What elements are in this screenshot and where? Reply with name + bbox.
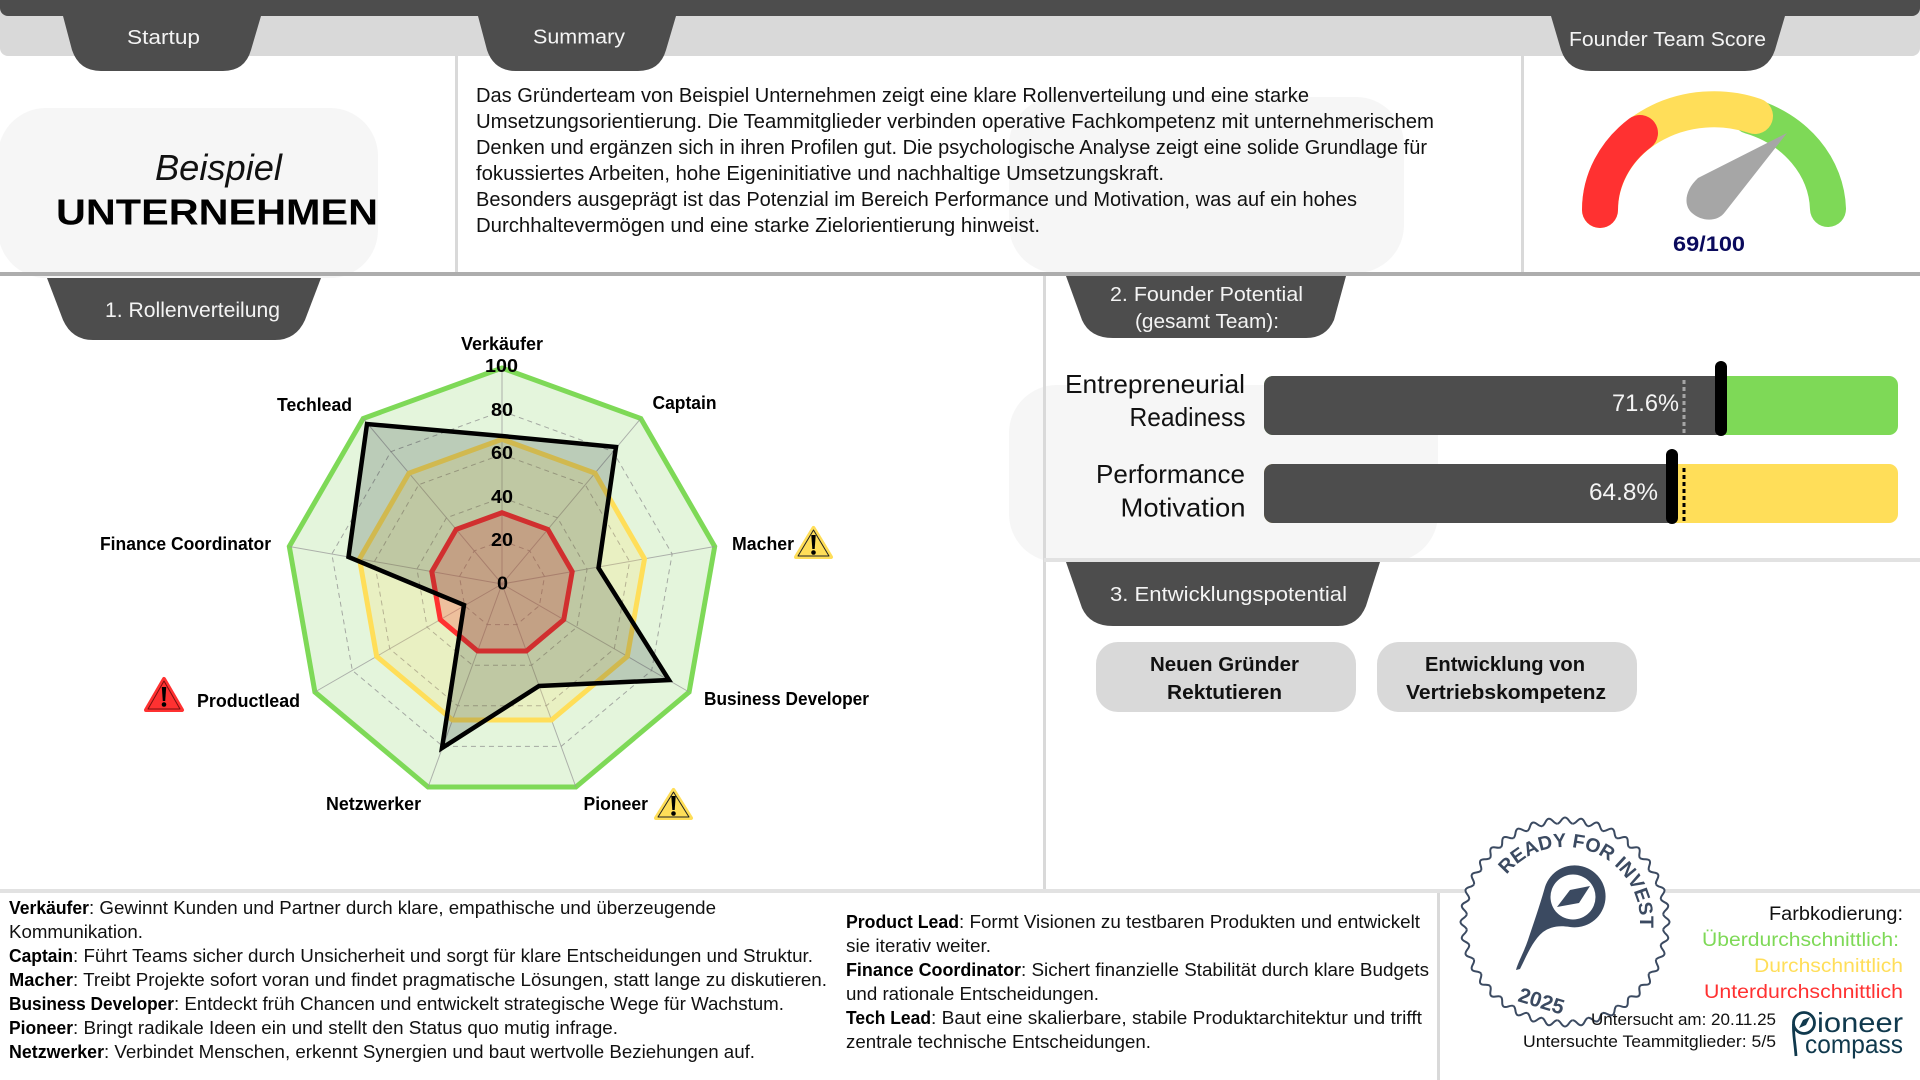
logo: pioneer compass: ioneer: [1817, 1007, 1903, 1038]
role descriptions: right column: [846, 912, 1429, 1052]
role descriptions: left column: : Verbindet Menschen, erkennt Synergien und baut wertvolle Beziehungen auf.: [104, 1042, 755, 1062]
radar axis labels: Techlead: [277, 395, 352, 415]
role descriptions: right column: : Baut eine skalierbare, stabile Produktarchitektur und trifft: [931, 1008, 1422, 1028]
role descriptions: left column: Captain: [9, 946, 73, 966]
role descriptions: left column: Netzwerker: [9, 1042, 104, 1062]
tab: 1. Rollenverteilung: [47, 278, 321, 340]
radar axis labels: Finance Coordinator: [100, 534, 271, 554]
summary text block: Besonders ausgeprägt ist das Potenzial im Bereich Performance und Motivation, was auf ein hohes: [476, 189, 1357, 211]
radar axis labels: Productlead: [197, 691, 300, 711]
tab: Founder Team Score: Founder Team Score: [1569, 29, 1766, 51]
role descriptions: left column: Verkäufer: [9, 898, 89, 918]
role descriptions: left column: [9, 898, 827, 1062]
panel card: summary background: [1009, 97, 1404, 273]
role descriptions: left column: : Führt Teams sicher durch Unsicherheit und sorgt für klare Entscheidungen und Struktur.: [73, 946, 813, 966]
logo: pioneer compass: compass: [1805, 1029, 1903, 1059]
button: Entwicklung von Vertriebskompetenz: [1377, 642, 1637, 712]
button: Neuen Gründer Rektutieren: Rektutieren: [1167, 682, 1282, 704]
bar: Performance Motivation: Performance: [1096, 459, 1245, 489]
bar: Entrepreneurial Readiness: Entrepreneurial: [1065, 369, 1245, 399]
radar below-average band: [432, 513, 572, 651]
role descriptions: right column: Product Lead: [846, 912, 959, 932]
tab: 1. Rollenverteilung: 1. Rollenverteilung: [105, 299, 280, 322]
summary text block: Umsetzungsorientierung. Die Teammitglieder verbinden operative Fachkompetenz mit unternehmerischem: [476, 111, 1434, 133]
role descriptions: left column: Pioneer: [9, 1018, 73, 1038]
tab: 3. Entwicklungspotential: 3. Entwicklungspotential: [1110, 584, 1347, 606]
button: Neuen Gründer Rektutieren: [1096, 642, 1356, 712]
gauge: founder team score: [1600, 109, 1828, 220]
startup name: UNTERNEHMEN: [56, 192, 378, 232]
role descriptions: right column: sie iterativ weiter.: [846, 936, 991, 956]
startup name: [56, 147, 378, 232]
bar: Performance Motivation: [1096, 449, 1898, 524]
radar scale numbers: 80: [491, 400, 513, 420]
role descriptions: left column: Business Developer: [9, 994, 174, 1014]
radar grid: [289, 368, 715, 787]
stamp: ready for invest 2025: READY FOR INVEST: [1498, 833, 1654, 928]
role descriptions: left column: : Bringt radikale Ideen ein und stellt den Status quo mutig infrage.: [73, 1018, 618, 1038]
tab: Startup: [63, 16, 261, 71]
radar scale numbers: 60: [491, 443, 513, 463]
tab: Startup: Startup: [127, 27, 200, 49]
radar team data: [348, 424, 669, 748]
radar outer area 100: [289, 368, 715, 787]
role descriptions: right column: und rationale Entscheidungen.: [846, 984, 1099, 1004]
legend: colour coding: Unterdurchschnittlich: [1704, 982, 1903, 1003]
radar scale numbers: 20: [491, 530, 513, 550]
panel card: founder potential background: [1009, 385, 1438, 562]
summary text block: Das Gründerteam von Beispiel Unternehmen zeigt eine klare Rollenverteilung und eine starke: [476, 85, 1309, 107]
logo: pioneer compass: [1793, 1007, 1903, 1059]
summary text block: fokussiertes Arbeiten, hohe Eigeninitiative und nachhaltige Umsetzungskraft.: [476, 163, 1164, 185]
role descriptions: left column: Kommunikation.: [9, 922, 143, 942]
legend: colour coding: [1702, 904, 1903, 1003]
bar: Entrepreneurial Readiness: Readiness: [1130, 402, 1246, 432]
tab: 2. Founder Potential: [1066, 276, 1346, 338]
radar axis labels: Pioneer: [584, 794, 648, 814]
button: Neuen Gründer Rektutieren: Neuen Gründer: [1150, 654, 1299, 676]
stamp: ready for invest 2025: 2025: [1516, 984, 1567, 1020]
bar: Performance Motivation: 64.8%: [1589, 479, 1658, 506]
icon: warning Macher: [796, 528, 831, 557]
summary text block: Durchhaltevermögen und eine starke Zielorientierung hinweist.: [476, 215, 1040, 237]
button: Entwicklung von Vertriebskompetenz: Entwicklung von: [1425, 654, 1585, 676]
startup name: Beispiel: [155, 147, 283, 188]
role descriptions: left column: : Gewinnt Kunden und Partner durch klare, empathische und überzeugende: [89, 898, 716, 918]
stamp: ready for invest 2025: [1460, 816, 1670, 1028]
radar scale numbers: 0: [497, 574, 508, 594]
bar: Entrepreneurial Readiness: 71.6%: [1612, 390, 1679, 417]
radar axis labels: [100, 334, 869, 814]
role descriptions: right column: : Formt Visionen zu testbaren Produkten und entwickelt: [959, 912, 1420, 932]
radar axis labels: Business Developer: [704, 689, 869, 709]
tab: 2. Founder Potential: (gesamt Team):: [1135, 311, 1279, 333]
icon: warning Pioneer: [656, 790, 691, 818]
tab: 2. Founder Potential: 2. Founder Potential: [1110, 284, 1303, 306]
tab: Founder Team Score: [1551, 16, 1785, 71]
legend: colour coding: Farbkodierung:: [1769, 904, 1903, 925]
role descriptions: right column: zentrale technische Entscheidungen.: [846, 1032, 1151, 1052]
radar axis labels: Macher: [732, 534, 794, 554]
bar: Performance Motivation: Motivation: [1120, 492, 1246, 522]
examination meta text: Untersuchte Teammitglieder: 5/5: [1523, 1033, 1776, 1051]
legend: colour coding: Durchschnittlich: [1754, 956, 1903, 977]
radar axis labels: Netzwerker: [326, 794, 421, 814]
radar scale numbers: 40: [491, 487, 513, 507]
radar average band: [359, 439, 645, 720]
header band: [0, 0, 1920, 56]
tab: Summary: Summary: [533, 26, 625, 48]
radar chart: role distribution: [100, 334, 869, 814]
radar axis labels: Verkäufer: [461, 334, 543, 354]
summary text block: [476, 85, 1434, 237]
role descriptions: left column: Macher: [9, 970, 73, 990]
role descriptions: right column: Finance Coordinator: [846, 960, 1021, 980]
radar scale numbers: [485, 356, 518, 594]
summary text block: Denken und ergänzen sich in ihren Profilen gut. Die psychologische Analyse zeigt eine solide Grundlage für: [476, 137, 1427, 159]
role descriptions: left column: : Entdeckt früh Chancen und entwickelt strategische Wege für Wachstum.: [174, 994, 784, 1014]
examination meta text: Untersucht am: 20.11.25: [1591, 1011, 1776, 1029]
role descriptions: left column: : Treibt Projekte sofort voran und findet pragmatische Lösungen, statt lange zu diskutieren.: [73, 970, 827, 990]
tab: 3. Entwicklungspotential: [1066, 562, 1380, 626]
gauge value: 69/100: [1673, 233, 1745, 256]
button: Entwicklung von Vertriebskompetenz: Vertriebskompetenz: [1406, 682, 1606, 704]
panel card: startup background: [0, 108, 378, 278]
role descriptions: right column: Tech Lead: [846, 1008, 931, 1028]
legend: colour coding: Überdurchschnittlich:: [1702, 930, 1899, 951]
role descriptions: right column: : Sichert finanzielle Stabilität durch klare Budgets: [1021, 960, 1429, 980]
examination meta text: [1523, 1011, 1776, 1051]
radar axis labels: Captain: [652, 393, 716, 413]
tab: Summary: [478, 16, 676, 71]
radar scale numbers: 100: [485, 356, 518, 376]
bar: Entrepreneurial Readiness: [1065, 361, 1898, 436]
icon: alert Productlead: [146, 679, 182, 710]
